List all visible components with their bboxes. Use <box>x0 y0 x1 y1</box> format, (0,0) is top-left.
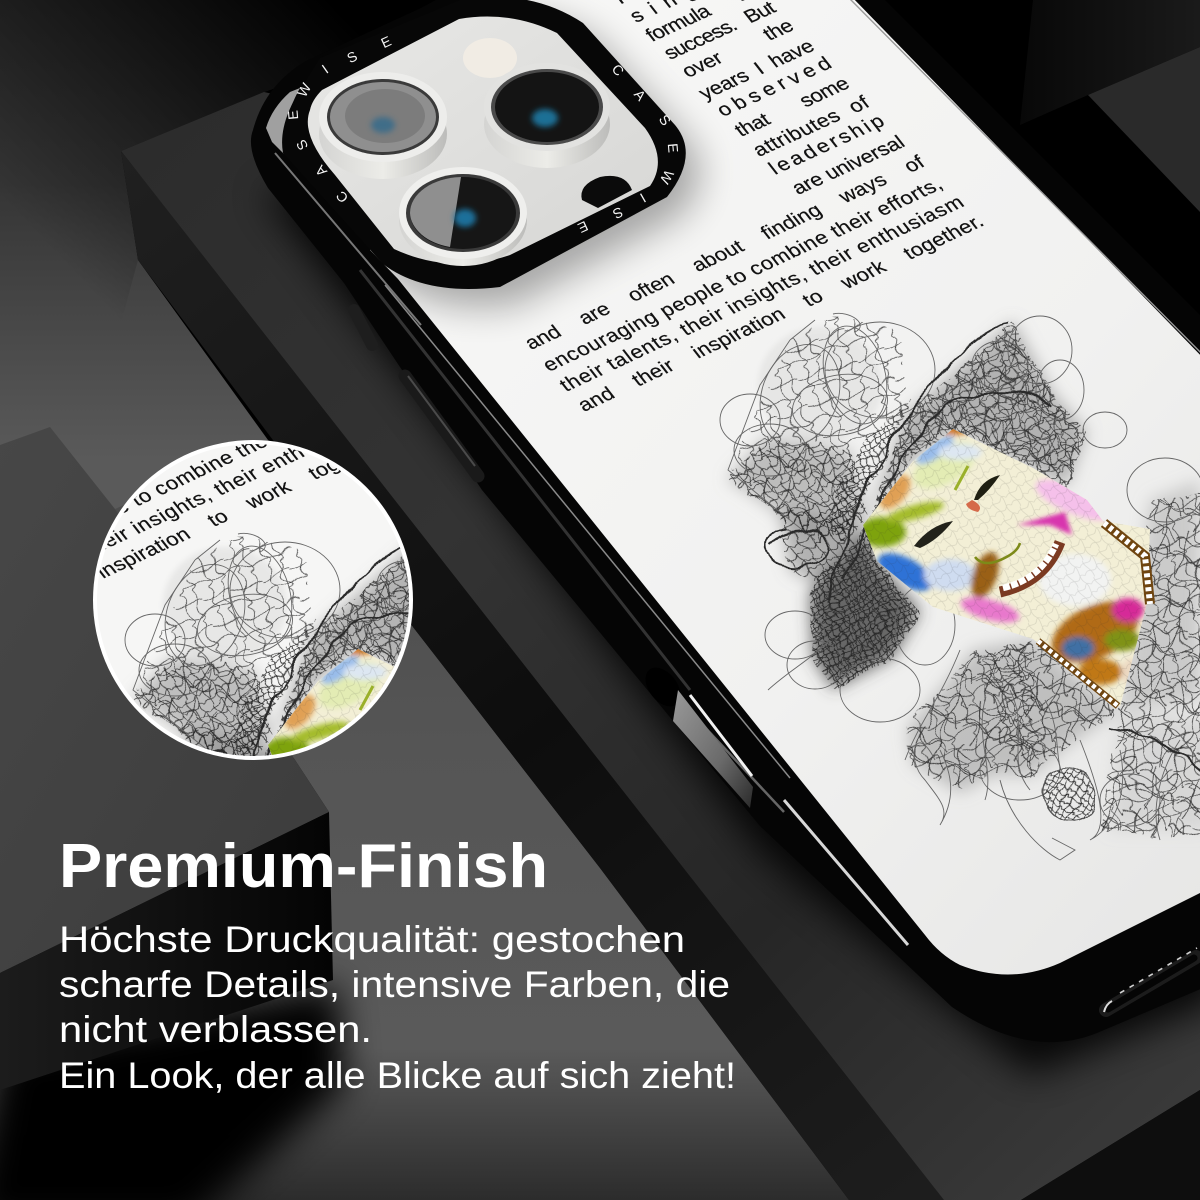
bezel lettering left: I <box>319 61 331 77</box>
bump shadow on backplate <box>297 15 700 307</box>
bezel lettering right: E <box>665 143 681 153</box>
hat bold brim arcs <box>766 322 1200 780</box>
side button silver <box>673 690 753 808</box>
silent switch <box>354 310 372 345</box>
body copy: Ein Look, der alle Blicke auf sich zieht! <box>59 1055 736 1096</box>
printed quote text: attributes of <box>748 92 874 161</box>
bezel lettering left: E <box>285 110 301 120</box>
printed quote text: over the <box>677 15 798 82</box>
bezel lettering left: E <box>378 33 394 51</box>
printed quote text: their talents, their insights, their enthusiasm <box>555 192 969 396</box>
body copy: Höchste Druckqualität: gestochen <box>59 919 685 960</box>
printed quote text: are universal <box>787 132 909 199</box>
main lens <box>319 72 447 179</box>
scribble strokes and loops <box>720 313 1200 860</box>
inset magnified content <box>97 444 409 756</box>
flash <box>463 38 517 78</box>
backplate edge line <box>850 0 1200 362</box>
printed quote text: and their inspiration to work together. <box>573 211 988 416</box>
scribble tonal base <box>727 321 1200 830</box>
inset white border <box>93 440 413 760</box>
body copy: scharfe Details, intensive Farben, die <box>59 964 730 1005</box>
bezel lettering left <box>285 33 394 206</box>
body copy <box>59 919 736 1096</box>
hat crown pale patch <box>758 327 882 443</box>
light glass strip at phone corner <box>266 88 300 154</box>
phone drop shadow <box>262 190 1200 1075</box>
bottom port <box>1104 948 1197 1012</box>
side button recess <box>638 661 688 713</box>
volume buttons <box>405 376 478 476</box>
screen / printed white backplate <box>370 0 1200 975</box>
bezel lettering right: E <box>575 218 591 236</box>
brooch <box>1042 767 1096 821</box>
bezel lettering left: A <box>311 162 330 180</box>
printed quote text <box>520 0 988 416</box>
bezel lettering right <box>575 61 681 236</box>
phone <box>251 0 1200 1042</box>
bezel lettering right: A <box>631 86 650 104</box>
printed quote text: leadership <box>764 111 889 179</box>
bezel lettering left: S <box>344 48 360 66</box>
camera bump <box>266 0 686 289</box>
bezel lettering right: I <box>637 190 649 206</box>
printed quote text: observed <box>712 53 836 121</box>
printed quote text: and are often about finding ways of <box>520 152 929 354</box>
hat and hair hatching <box>727 314 1200 840</box>
microphone hole <box>581 176 632 208</box>
telephoto lens <box>484 63 610 168</box>
case rim lines <box>275 153 908 945</box>
artwork: scribble portrait <box>720 313 1200 860</box>
bezel lettering left: C <box>333 188 351 206</box>
bezel lettering right: S <box>610 204 626 222</box>
zoom inset circle <box>93 440 413 760</box>
pearl necklace <box>1038 523 1150 706</box>
printed quote text: encouraging people to combine their efforts, <box>538 174 947 376</box>
ultra wide lens <box>399 167 527 266</box>
heading: Premium-Finish <box>59 832 548 901</box>
printed quote text: years I have <box>694 36 819 104</box>
clear camera window <box>308 16 658 264</box>
printed quote text: that some <box>730 73 854 141</box>
face <box>850 420 1160 720</box>
bezel lettering right: W <box>656 167 677 187</box>
body copy: nicht verblassen. <box>59 1009 372 1050</box>
bump black bezel <box>282 0 686 289</box>
face features: eyes, nose, smile <box>914 466 1072 592</box>
bezel lettering right: S <box>656 112 674 128</box>
bezel lettering left: W <box>294 80 315 100</box>
phone case body <box>251 0 1200 1042</box>
bezel lettering right: C <box>609 61 627 79</box>
bezel lettering left: S <box>293 137 311 153</box>
